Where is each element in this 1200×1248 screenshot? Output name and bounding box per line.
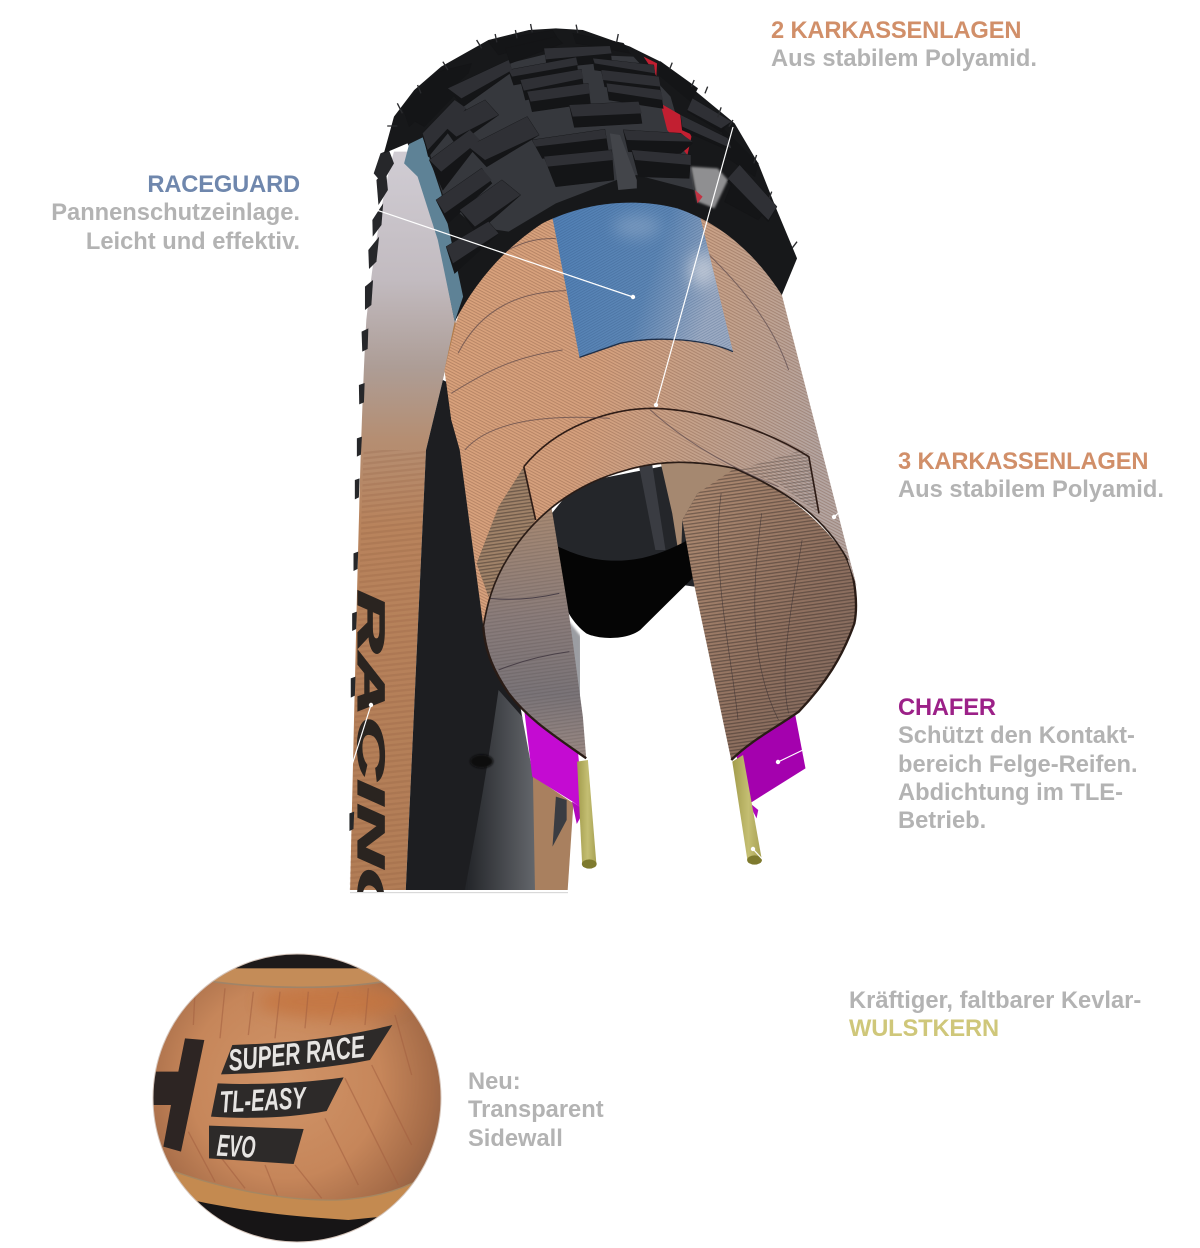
label: chafer: bereich Felge-Reifen. (898, 752, 1138, 778)
label: chafer (898, 695, 1138, 834)
leader line: 2 karkassenlagen (654, 127, 733, 407)
fine seams (451, 238, 789, 487)
black inner tread blob (551, 538, 694, 638)
blue-grey tread flank (404, 137, 463, 322)
brown far sidewall (533, 776, 573, 890)
knob spikes (387, 24, 797, 248)
label: 2 karkassenlagen: 2 KARKASSENLAGEN (771, 18, 1021, 44)
black rim strip (406, 380, 522, 890)
red inner layer showing through (644, 57, 691, 155)
valve hole (470, 755, 493, 768)
far side tire: sidewall and rim (349, 150, 582, 935)
right flap (738, 450, 819, 513)
bead core left (577, 760, 597, 869)
label: evo (209, 1126, 304, 1165)
top tan band and black edge (214, 968, 380, 986)
detail circle: transparent sidewall (152, 952, 442, 1248)
leader line: raceguard (376, 210, 635, 299)
bead core right (732, 755, 762, 865)
grey rim flank (466, 690, 535, 890)
label: wulstkern: Kräftiger, faltbarer Kevlar- (849, 988, 1141, 1014)
tire logo fragment (152, 1038, 204, 1152)
carcass layers surface (445, 180, 857, 627)
left sidewall (350, 152, 456, 890)
label: chafer: Betrieb. (898, 808, 986, 834)
left flap with strong striping (477, 467, 536, 597)
tire cutaway illustration (152, 24, 858, 1242)
label: transparent sidewall: Neu: (468, 1069, 521, 1095)
label: 3 karkassenlagen: Aus stabilem Polyamid. (898, 477, 1164, 503)
back brown edge (445, 322, 475, 453)
raceguard patch (552, 202, 734, 358)
label: transparent sidewall (468, 1069, 604, 1152)
pale tread patch (691, 167, 728, 208)
sidewall side knobs (349, 150, 394, 831)
tread block (384, 24, 797, 322)
pale rim glow (570, 620, 580, 695)
opening rim line (483, 462, 848, 627)
bottom tan band and black edge (174, 1172, 412, 1220)
inner right wall of casing (682, 468, 856, 760)
casing exterior (445, 180, 857, 627)
leader line: transparent sidewall (352, 703, 373, 765)
tread ground (424, 53, 694, 232)
center ridge (610, 133, 637, 190)
label: wulstkern: WULSTKERN (849, 1016, 999, 1042)
bottom ground hairline (350, 892, 568, 893)
label: transparent sidewall: Sidewall (468, 1126, 563, 1152)
upper layer seam (524, 408, 819, 520)
label: tl-easy: TL-EASY (219, 1081, 308, 1120)
label: evo: EVO (216, 1129, 256, 1165)
sidewall shading (258, 985, 405, 1018)
label: raceguard (51, 172, 300, 255)
label: raceguard: Pannenschutzeinlage. (51, 200, 300, 226)
label: raceguard: Leicht und effektiv. (86, 229, 300, 255)
label: 2 karkassenlagen: Aus stabilem Polyamid. (771, 46, 1037, 72)
label: super race: SUPER RACE (227, 1030, 367, 1078)
tread silhouette (384, 28, 797, 322)
tread knobs (402, 30, 777, 273)
leader line: 3 karkassenlagen (832, 509, 843, 519)
label: chafer: CHAFER (898, 695, 996, 721)
label: chafer: Abdichtung im TLE- (898, 780, 1123, 806)
label: wulstkern (849, 988, 1141, 1042)
label: chafer: Schützt den Kontakt- (898, 723, 1135, 749)
inner left wall of casing (483, 503, 586, 758)
leader line: chafer (776, 749, 805, 764)
sidewall lettering: RACING (349, 590, 391, 935)
label: 2 karkassenlagen (771, 18, 1037, 72)
inner back of tire (509, 457, 812, 587)
chafer left (524, 707, 585, 824)
leader line: wulstkern (751, 847, 763, 860)
chafer right (735, 707, 805, 818)
label: raceguard: RACEGUARD (147, 172, 300, 198)
knob top faces (423, 46, 777, 263)
label: 3 karkassenlagen (898, 449, 1164, 503)
casing seams (188, 988, 412, 1198)
label: 3 karkassenlagen: 3 KARKASSENLAGEN (898, 449, 1148, 475)
label: transparent sidewall: Transparent (468, 1097, 604, 1123)
